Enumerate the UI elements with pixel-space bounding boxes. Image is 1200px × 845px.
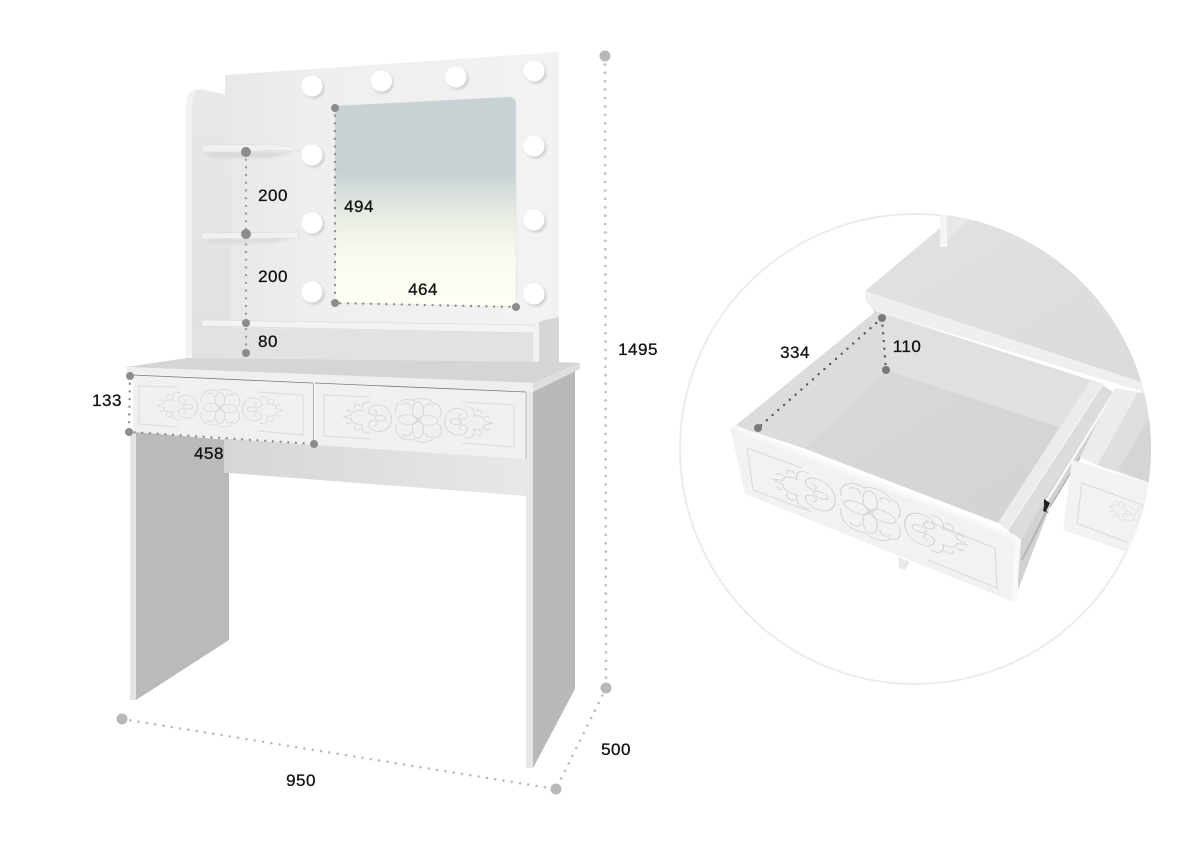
label 200 upper: 200: [258, 186, 288, 205]
label 458: 458: [194, 444, 224, 463]
side upright panel: [186, 89, 231, 362]
label 500: 500: [601, 740, 631, 759]
height dimension 1495: [600, 50, 612, 694]
shelf spacing markers: [241, 147, 251, 357]
lower niche: [192, 327, 533, 368]
clipped drawer scene: [730, 214, 1151, 602]
top shelf: [202, 144, 299, 152]
drawer outer side: [1008, 385, 1113, 545]
table front edge: [865, 291, 1142, 391]
mirror size markers: [331, 104, 520, 311]
overall dimension lines: [116, 50, 612, 794]
table top: [126, 358, 580, 392]
label 1495: 1495: [618, 340, 658, 359]
label 80: 80: [258, 332, 278, 351]
second drawer: [1063, 388, 1151, 552]
inner dimension lines: [125, 104, 520, 448]
label 950: 950: [286, 771, 316, 790]
upper back panel post: [940, 214, 947, 247]
dressing table: [126, 52, 580, 768]
right shelf support: [533, 317, 559, 372]
label 464: 464: [408, 280, 438, 299]
circle outline: [680, 214, 1150, 684]
drawer slide rail: [1018, 392, 1117, 590]
width dimension 950: [116, 714, 556, 789]
drawer inner markers: [754, 314, 890, 432]
support post under drawer: [898, 557, 910, 570]
label 200 lower: 200: [258, 267, 288, 286]
lower shelf: [202, 320, 534, 333]
right drawer: [315, 383, 526, 459]
right leg: [526, 368, 575, 768]
apron: [224, 438, 526, 496]
detail circle: open drawer: [680, 205, 1192, 684]
drawer front panel: [730, 425, 1021, 603]
drawer size markers: [125, 372, 318, 448]
dimension labels: [92, 186, 658, 790]
label 110: 110: [893, 337, 921, 356]
depth dimension 500: [550, 688, 606, 794]
drawer interior: [735, 310, 1103, 530]
left leg: [130, 430, 229, 700]
label 494: 494: [344, 197, 374, 216]
left drawer: [133, 375, 314, 445]
table surface: [865, 220, 1142, 382]
mirror: [335, 97, 516, 307]
middle shelf: [202, 232, 299, 239]
label 334: 334: [780, 343, 810, 362]
shelf shadows: [206, 152, 296, 244]
bulbs: [302, 60, 546, 306]
label 133: 133: [92, 391, 122, 410]
mirror back panel: [225, 52, 559, 365]
